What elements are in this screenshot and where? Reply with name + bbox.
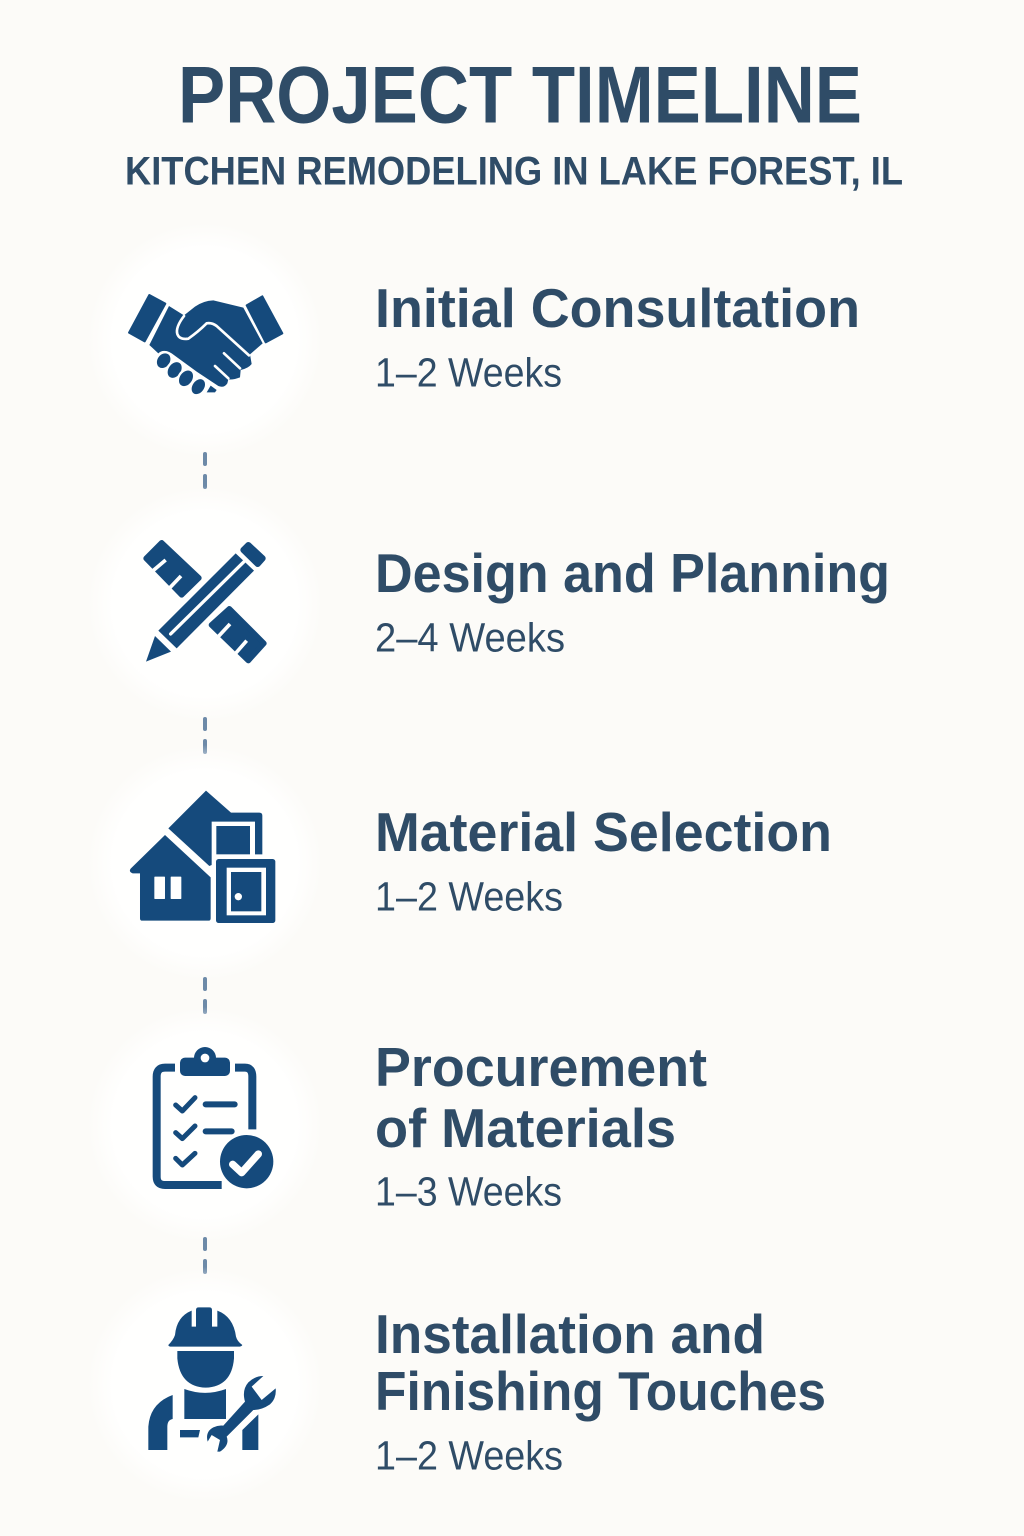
- icon: worker with wrench: [148, 1307, 276, 1452]
- step heading line 2: of Materials: [375, 1097, 676, 1159]
- connector 2: [203, 717, 207, 754]
- title: PROJECT TIMELINE: [178, 50, 862, 140]
- subtitle: KITCHEN REMODELING IN LAKE FOREST, IL: [125, 150, 903, 194]
- step 2: design and planning: [87, 486, 890, 722]
- connector 4: [203, 1237, 207, 1274]
- icon: handshake: [129, 295, 282, 398]
- step heading line 1: Installation and: [375, 1303, 765, 1365]
- step heading: Design and Planning: [375, 542, 890, 604]
- step 1: initial consultation: [87, 222, 860, 458]
- step duration: 1–2 Weeks: [375, 874, 563, 920]
- step 5: installation and finishing: [87, 1267, 826, 1503]
- step duration: 1–3 Weeks: [375, 1168, 562, 1214]
- connector 1: [203, 452, 207, 489]
- step duration: 1–2 Weeks: [375, 350, 562, 396]
- icon: pencil and ruler: [146, 543, 264, 662]
- step duration: 2–4 Weeks: [375, 614, 565, 660]
- step duration: 1–2 Weeks: [375, 1432, 563, 1478]
- step heading line 2: Finishing Touches: [375, 1360, 826, 1422]
- icon: clipboard checklist: [157, 1047, 273, 1188]
- connector 3: [203, 977, 207, 1014]
- icon: house with window and door: [130, 791, 275, 923]
- step heading line 1: Procurement: [375, 1036, 707, 1098]
- step 4: procurement of materials: [87, 1007, 707, 1243]
- step heading: Initial Consultation: [375, 277, 860, 339]
- step heading: Material Selection: [375, 801, 832, 863]
- step 3: material selection: [87, 745, 832, 981]
